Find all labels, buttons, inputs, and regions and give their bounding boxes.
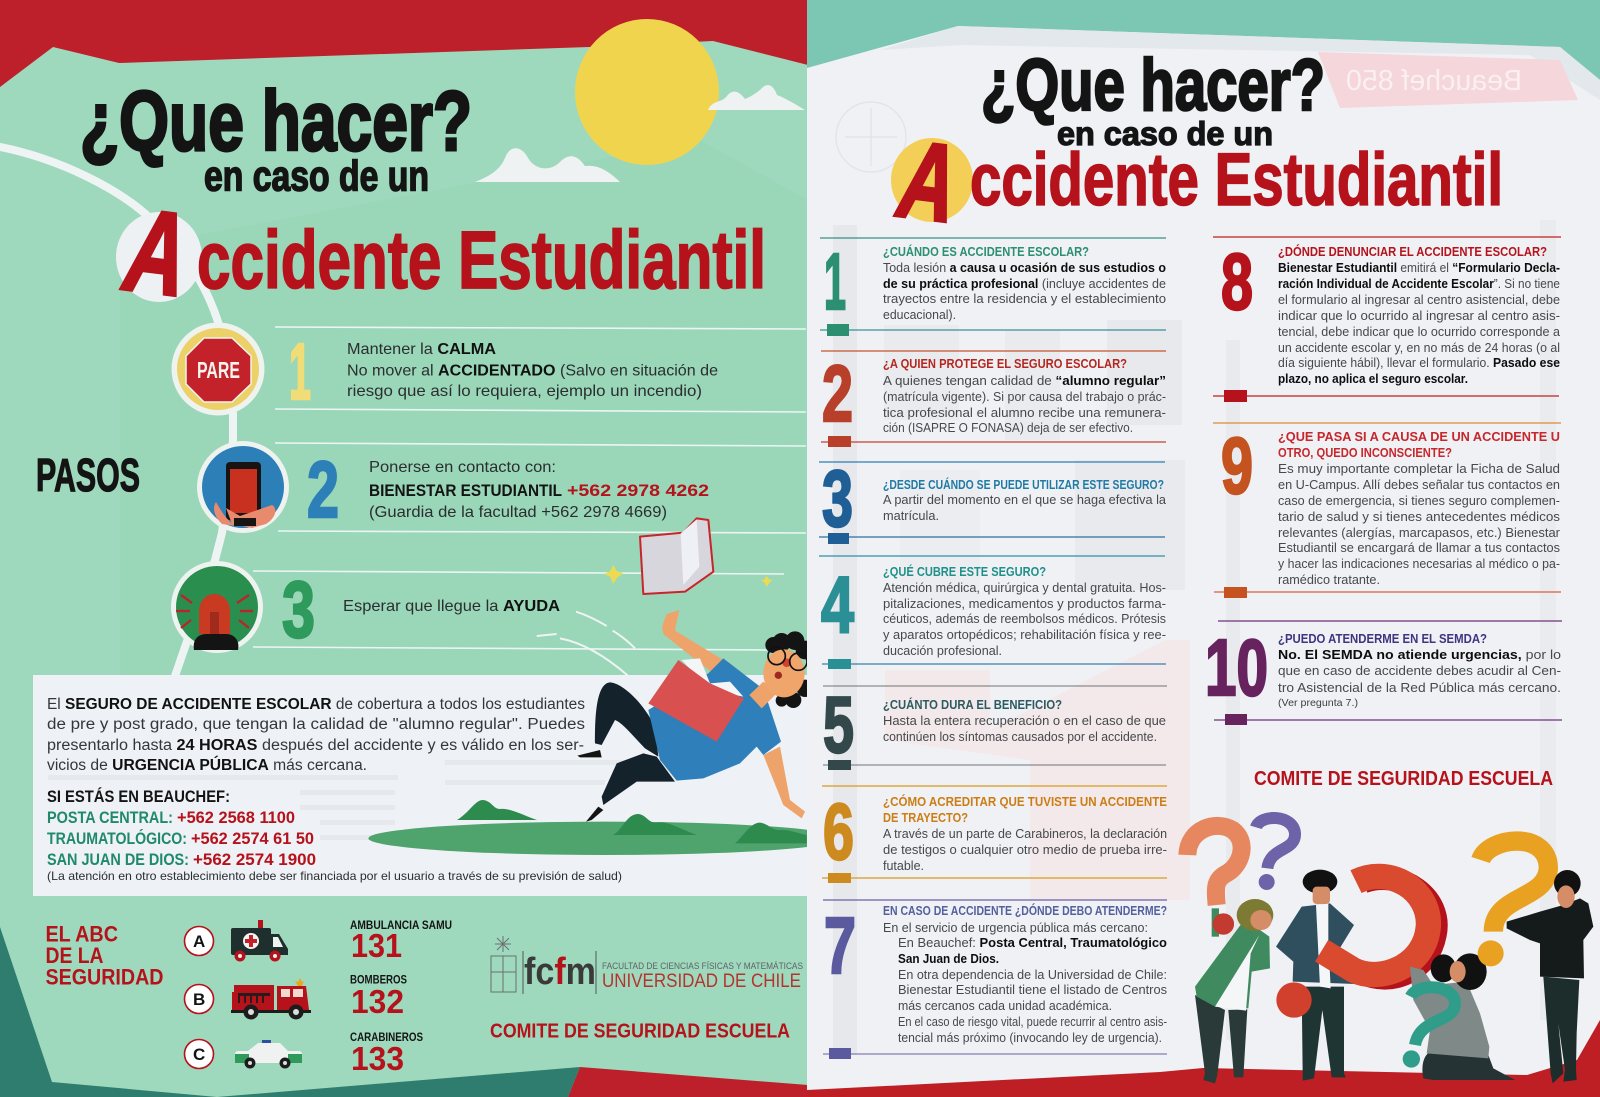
item 1: 1 xyxy=(824,237,846,326)
step divider lines xyxy=(253,327,806,650)
item 5: ¿CUÁNTO DURA EL BENEFICIO? xyxy=(883,697,1062,712)
step 2 number: 2 xyxy=(307,445,339,534)
stars xyxy=(604,565,772,587)
item 5: continúen los síntomas causados por el accidente. xyxy=(883,730,1157,744)
left title: accidente estudiantil xyxy=(117,184,766,322)
item 10 xyxy=(1205,621,1562,725)
item 10: tro Asistencial de la Red Pública más cercano. xyxy=(1278,681,1561,695)
item 9: ramédico tratante. xyxy=(1278,573,1380,587)
step 2 text xyxy=(369,459,709,521)
item 9: OTRO, QUEDO INCONSCIENTE? xyxy=(1278,446,1452,460)
university logo: UNIVERSIDAD DE CHILE xyxy=(602,971,801,992)
item 9 xyxy=(1213,421,1561,598)
beauchef contacts: SI ESTÁS EN BEAUCHEF: xyxy=(47,787,230,806)
item 3 xyxy=(819,454,1166,544)
panel: seguro info xyxy=(33,675,808,896)
item 1 xyxy=(820,237,1166,336)
item 4: Atención médica, quirúrgica y dental gratuita. Hos- xyxy=(883,581,1166,595)
falling student illustration xyxy=(368,518,842,855)
item 7: 7 xyxy=(824,901,856,990)
beauchef contacts: +562 2568 1100 xyxy=(177,809,295,827)
item 5: 5 xyxy=(823,680,854,769)
right committee label: COMITE DE SEGURIDAD ESCUELA xyxy=(1254,768,1553,790)
bushes xyxy=(613,814,807,843)
university logo xyxy=(491,936,803,994)
item 3: A partir del momento en el que se haga efectiva la xyxy=(883,493,1166,507)
step 1 text xyxy=(347,341,718,400)
icon: police car xyxy=(235,1040,302,1068)
road xyxy=(0,146,233,676)
info paragraph: vicios de URGENCIA PÚBLICA más cercana. xyxy=(47,756,367,774)
emergency numbers: CARABINEROS xyxy=(350,1032,423,1044)
item 9: Es muy importante completar la Ficha de Salud xyxy=(1278,462,1560,476)
item 7: En Beauchef: Posta Central, Traumatológico xyxy=(898,936,1167,950)
beauchef contacts: POSTA CENTRAL: xyxy=(47,809,173,827)
step 1 text: riesgo que así lo requiera, ejemplo un incendio) xyxy=(347,383,702,400)
abc heading: DE LA xyxy=(46,943,104,968)
right title: en caso de un: en caso de un xyxy=(1057,115,1273,152)
step 1 text: No mover al ACCIDENTADO (Salvo en situación de xyxy=(347,362,718,380)
icon: ambulance xyxy=(231,920,288,962)
item 9: relevantes (alergías, marcapasos, etc.) Bienestar xyxy=(1278,526,1560,540)
item 9: tario de salud y si tienes antecedentes médicos xyxy=(1278,510,1560,524)
item 1: Toda lesión a causa u ocasión de sus estudios o xyxy=(883,261,1166,275)
item 1: de su práctica profesional (incluye accidentes de xyxy=(883,277,1166,291)
flying book xyxy=(640,518,713,594)
item 8: día siguiente hábil), llevar el formulario. Pasado ese xyxy=(1278,356,1560,370)
item 2: (matrícula vigente). Si por causa del trabajo o prác- xyxy=(883,390,1166,404)
item 6: de testigos o cualquier otro medio de prueba irre- xyxy=(883,843,1167,857)
right title: que hacer: ¿Que hacer? xyxy=(981,45,1325,126)
item 8: 8 xyxy=(1221,237,1253,326)
A circle xyxy=(116,212,202,302)
abc heading: EL ABC xyxy=(46,922,118,946)
icon: siren xyxy=(171,561,263,653)
sun xyxy=(575,19,719,165)
held book xyxy=(682,658,743,697)
item 7: En el caso de riesgo vital, puede recurrir al centro asis- xyxy=(898,1015,1167,1029)
faint map background xyxy=(833,26,1600,1055)
beauchef sign xyxy=(1318,52,1578,108)
footnote: (La atención en otro establecimiento debe ser financiada por el usuario a través de su previsión de salud) xyxy=(47,869,622,883)
red top banner xyxy=(0,0,808,87)
item 7: Bienestar Estudiantil tiene el listado de Centros xyxy=(898,983,1167,997)
purple question mark xyxy=(1256,818,1295,890)
faint show-through xyxy=(48,760,625,840)
item 9: Estudiantil se encargará de llamar a tus contactos xyxy=(1278,541,1560,555)
emergency numbers: 131 xyxy=(351,927,402,964)
item 5: Hasta la entera recuperación o en el caso de que xyxy=(883,714,1166,728)
item 7 xyxy=(823,900,1167,1059)
icon: stop sign: PARE xyxy=(197,357,240,383)
emergency numbers: BOMBEROS xyxy=(350,974,407,986)
bottom red floor xyxy=(807,1020,1600,1097)
yellow question mark xyxy=(1478,841,1548,966)
illustration: people and question marks xyxy=(1187,818,1593,1083)
item 7: tencial más próximo (invocando ley de urgencia). xyxy=(898,1031,1162,1045)
pasos heading: PASOS xyxy=(36,449,140,501)
cloud left xyxy=(475,148,620,182)
item 8 xyxy=(1213,237,1561,402)
beauchef contacts: SAN JUAN DE DIOS: xyxy=(47,851,189,869)
abc heading: SEGURIDAD xyxy=(46,964,164,990)
emergency numbers: AMBULANCIA SAMU xyxy=(350,920,452,932)
item 3: 3 xyxy=(822,454,853,543)
beauchef contacts: +562 2574 1900 xyxy=(193,851,316,869)
item 1: educacional). xyxy=(883,308,956,322)
left title: accidente estudiantil: A xyxy=(117,184,194,322)
item 4: ducación profesional. xyxy=(883,644,1002,658)
bottom teal band xyxy=(217,1067,580,1097)
left title: que hacer: ¿Que hacer? xyxy=(80,74,472,168)
university logo: FACULTAD DE CIENCIAS FÍSICAS Y MATEMÁTICAS xyxy=(602,961,803,972)
bottom teal corner xyxy=(0,927,217,1097)
beauchef sign: Beauchef 850 xyxy=(1346,65,1522,97)
info paragraph: El SEGURO DE ACCIDENTE ESCOLAR de cobertura a todos los estudiantes xyxy=(47,696,585,713)
icon: fire truck xyxy=(231,978,311,1020)
icon: stop sign xyxy=(172,322,264,416)
panel: right page xyxy=(807,0,1600,1097)
man in black xyxy=(1507,870,1593,1083)
front leg xyxy=(595,682,658,757)
item 2: tica profesional el alumno recibe una remunera- xyxy=(883,406,1166,420)
cloud right xyxy=(708,85,805,110)
item 9: y hacer las indicaciones necesarias al médico o pa- xyxy=(1278,557,1560,571)
emergency numbers xyxy=(350,920,452,1077)
compass xyxy=(836,102,906,172)
emergency numbers: 132 xyxy=(351,983,404,1020)
university logo: fcfm xyxy=(524,951,596,993)
right title: accidente estudiantil xyxy=(891,117,1503,246)
step 2 text: +562 2978 4262 xyxy=(567,481,709,500)
item 8: Bienestar Estudiantil emitirá el “Formulario Decla- xyxy=(1278,261,1560,275)
item 2: 2 xyxy=(822,349,853,438)
item 2: A quienes tengan calidad de “alumno regular” xyxy=(883,374,1166,388)
panel: left page: 1 xyxy=(289,327,311,416)
motion lines xyxy=(537,612,635,676)
item 9: 9 xyxy=(1221,421,1253,510)
yellow circle xyxy=(891,138,973,222)
item 4: ¿QUÉ CUBRE ESTE SEGURO? xyxy=(883,564,1046,579)
green ground xyxy=(368,822,842,855)
icon: phone in hands xyxy=(197,441,289,533)
panel: left page xyxy=(0,0,842,1097)
item 6: A través de un parte de Carabineros, la declaración xyxy=(883,827,1167,841)
kneeling woman xyxy=(1403,953,1515,1080)
orange question mark xyxy=(1187,826,1242,935)
item 2 xyxy=(821,349,1166,447)
item 10: (Ver pregunta 7.) xyxy=(1278,697,1358,709)
item 9: en U-Campus. Allí debes señalar tus contactos en xyxy=(1278,478,1560,492)
woman with green sweater xyxy=(1195,899,1273,1083)
item 9: ¿QUE PASA SI A CAUSA DE UN ACCIDENTE U xyxy=(1278,430,1560,444)
info paragraph xyxy=(47,696,585,774)
step 2 text: Ponerse en contacto con: xyxy=(369,459,556,476)
info paragraph: presentarlo hasta 24 HORAS después del accidente y es válido en los ser- xyxy=(47,737,584,754)
bottom red corner xyxy=(568,1067,808,1097)
item 2: ción (ISAPRE O FONASA) deja de ser efectivo. xyxy=(883,421,1133,435)
badge C xyxy=(184,1040,214,1068)
right title: accidente estudiantil: A xyxy=(891,117,963,246)
item 8: el formulario al ingresar al centro asistencial, debe xyxy=(1278,293,1560,307)
item 1: ¿CUÁNDO ES ACCIDENTE ESCOLAR? xyxy=(883,244,1089,259)
badge B: B xyxy=(193,990,205,1009)
item 8: plazo, no aplica el seguro escolar. xyxy=(1278,372,1468,386)
support arm xyxy=(763,747,805,818)
neck and head xyxy=(749,682,777,708)
beauchef contacts: +562 2574 61 50 xyxy=(191,830,314,848)
item 6 xyxy=(822,786,1167,883)
left title: en caso de un: en caso de un xyxy=(204,152,429,200)
item 3: matrícula. xyxy=(883,509,939,523)
item 4: y aparatos ortopédicos; rehabilitación física y ree- xyxy=(883,628,1166,642)
item 6: 6 xyxy=(823,787,854,876)
item 9: caso de emergencia, si tienes seguro complemen- xyxy=(1278,494,1560,508)
item 10: que en caso de accidente debes acudir al Cen- xyxy=(1278,664,1561,678)
man with jacket xyxy=(1276,870,1355,1081)
step 1 text: Mantener la CALMA xyxy=(347,341,496,358)
item 2: ¿A QUIEN PROTEGE EL SEGURO ESCOLAR? xyxy=(883,357,1127,371)
item 10: ¿PUEDO ATENDERME EN EL SEMDA? xyxy=(1278,632,1487,646)
item 4 xyxy=(819,556,1166,669)
item 7: En otra dependencia de la Universidad de Chile: xyxy=(898,968,1167,982)
bush left of panel xyxy=(457,800,537,820)
back leg xyxy=(602,753,675,805)
item 10: No. El SEMDA no atiende urgencias, por lo xyxy=(1278,648,1561,662)
beauchef contacts: TRAUMATOLÓGICO: xyxy=(47,829,187,848)
item 4: pitalizaciones, medicamentos y productos farma- xyxy=(883,597,1166,611)
item 8: ¿DÓNDE DENUNCIAR EL ACCIDENTE ESCOLAR? xyxy=(1278,244,1547,259)
torso xyxy=(648,658,781,781)
step 3 text: Esperar que llegue la AYUDA xyxy=(343,598,560,615)
item 8: un accidente escolar y, en no más de 24 horas (o al xyxy=(1278,341,1560,355)
item 8: indicar que lo ocurrido al ingresar al centro asis- xyxy=(1278,309,1560,323)
emergency numbers: 133 xyxy=(351,1040,404,1077)
item 8: tencial, debe indicar que lo ocurrido corresponde a xyxy=(1278,325,1560,339)
badge C: C xyxy=(193,1045,205,1064)
large red question mark xyxy=(1276,876,1436,1018)
item 6: DE TRAYECTO? xyxy=(883,811,968,825)
raised arm xyxy=(662,610,723,673)
item 7: más cercanos cada unidad académica. xyxy=(898,999,1112,1013)
step 2 text: (Guardia de la facultad +562 2978 4669) xyxy=(369,504,667,521)
beauchef contacts xyxy=(47,787,316,869)
step 2 text: BIENESTAR ESTUDIANTIL xyxy=(369,482,562,500)
info paragraph: de pre y post grado, que tengan la calidad de "alumno regular". Puedes xyxy=(47,716,585,733)
item 6: ¿CÓMO ACREDITAR QUE TUVISTE UN ACCIDENTE xyxy=(883,794,1167,809)
left committee label: COMITE DE SEGURIDAD ESCUELA xyxy=(490,1020,790,1042)
item 1: trayectos entre la residencia y el establecimiento xyxy=(883,292,1166,306)
item 3: ¿DESDE CUÁNDO SE PUEDE UTILIZAR ESTE SEGURO? xyxy=(883,477,1164,492)
item 6: futable. xyxy=(883,859,924,873)
item 7: En el servicio de urgencia pública más cercano: xyxy=(883,921,1148,935)
item 10: 10 xyxy=(1205,623,1268,712)
item 7: EN CASO DE ACCIDENTE ¿DÓNDE DEBO ATENDERME? xyxy=(883,903,1167,918)
left title: accidente estudiantil: ccidente Estudiantil xyxy=(197,215,766,306)
badge A xyxy=(184,926,214,956)
item 7: San Juan de Dios. xyxy=(898,952,999,966)
item 4: 4 xyxy=(821,560,854,649)
badge B xyxy=(184,984,214,1014)
abc heading xyxy=(46,922,164,990)
step 3 number: 3 xyxy=(282,565,315,654)
badge A: A xyxy=(193,932,205,951)
item 4: céuticos, además de reembolsos médicos. Prótesis xyxy=(883,612,1166,626)
item 8: ración Individual de Accidente Escolar”. Si no tiene xyxy=(1278,277,1560,291)
item 5 xyxy=(823,680,1167,770)
